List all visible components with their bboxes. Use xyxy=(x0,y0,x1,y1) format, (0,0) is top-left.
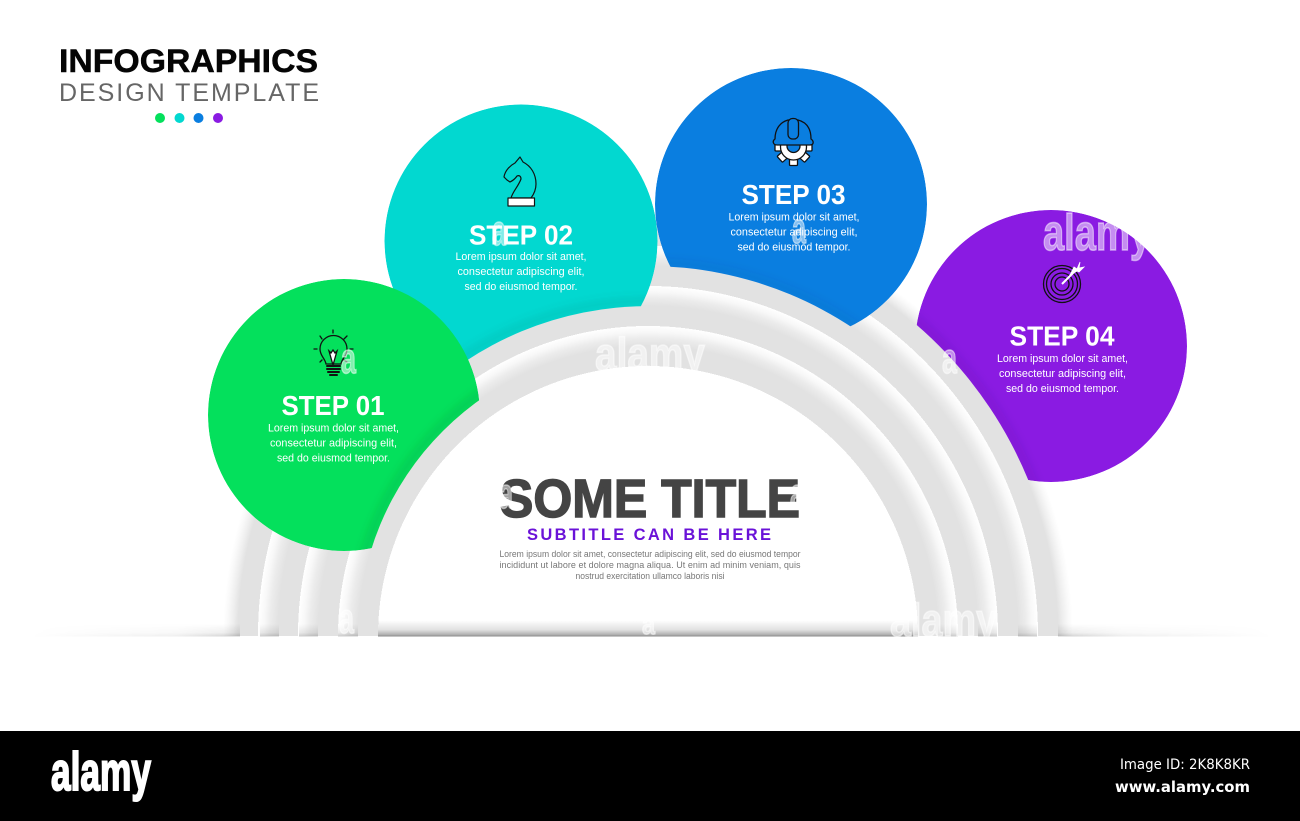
paragraph xyxy=(500,549,801,581)
purple circle shape cut by ring xyxy=(916,210,1187,482)
alamy logo: alamy xyxy=(51,742,151,802)
watermarks: a xyxy=(499,470,514,518)
step 03 text: sed do eiusmod tempor. xyxy=(738,242,850,254)
step 01 text: sed do eiusmod tempor. xyxy=(277,452,390,464)
teal circle shape cut by ring xyxy=(384,104,658,360)
header: infographics design template xyxy=(59,43,319,123)
panel: step 04 purple circle xyxy=(916,210,1187,482)
floor shadow under the half rings xyxy=(106,623,1195,636)
heading: infographics: INFOGRAPHICS xyxy=(59,43,318,79)
watermarks: a xyxy=(339,595,355,643)
concentric grey half rings xyxy=(218,206,1078,636)
watermarks xyxy=(339,204,1151,646)
step 01 text xyxy=(268,422,399,464)
step 04 text: Lorem ipsum dolor sit amet, xyxy=(997,353,1128,365)
step 01 heading: STEP 01 xyxy=(282,390,384,421)
step 03 text: Lorem ipsum dolor sit amet, xyxy=(728,212,860,224)
watermarks: a xyxy=(792,205,807,253)
step 02 text: sed do eiusmod tempor. xyxy=(464,281,578,293)
step 02 text xyxy=(456,251,586,293)
watermarks: a xyxy=(942,335,958,383)
watermarks: a xyxy=(341,335,357,383)
icon: target with dart xyxy=(1044,262,1084,302)
step 03 text: consectetur adipiscing elit, xyxy=(730,226,858,238)
paragraph: Lorem ipsum dolor sit amet, consectetur adipiscing elit, sed do eiusmod tempor xyxy=(500,549,800,559)
step 02 text: consectetur adipiscing elit, xyxy=(458,266,584,278)
green circle shape cut by ring xyxy=(208,279,480,551)
subheading: design template: DESIGN TEMPLATE xyxy=(59,79,319,107)
blue circle shape cut by ring xyxy=(655,68,927,326)
paragraph: incididunt ut labore et dolore magna aliqua. Ut enim ad minim veniam, quis xyxy=(500,560,801,570)
icon: chess knight xyxy=(504,157,536,206)
watermarks: alamy xyxy=(1043,204,1151,261)
four colour dots xyxy=(155,113,223,123)
footer bar xyxy=(0,731,1300,821)
step 01 text: consectetur adipiscing elit, xyxy=(270,438,397,450)
panel: step 03 blue circle xyxy=(655,68,927,326)
panel: step 01 green circle xyxy=(208,279,480,551)
watermarks: a xyxy=(492,207,507,255)
watermarks: alamy xyxy=(890,594,997,646)
step 04 heading: STEP 04 xyxy=(1010,320,1115,352)
image id: Image ID: 2K8K8KR xyxy=(1120,757,1250,773)
icon: helmet with gear xyxy=(773,118,813,166)
centre text block xyxy=(500,469,801,581)
step 03 heading: STEP 03 xyxy=(742,179,846,210)
watermarks: a xyxy=(642,608,655,641)
icon: light bulb xyxy=(314,330,353,375)
watermarks: a xyxy=(790,470,805,518)
step 04 text: sed do eiusmod tempor. xyxy=(1006,383,1119,395)
step 03 text xyxy=(728,212,860,254)
step 02 text: Lorem ipsum dolor sit amet, xyxy=(456,251,586,263)
panel: step 02 teal circle xyxy=(384,104,658,360)
watermarks: alamy xyxy=(595,328,705,380)
step 01 text: Lorem ipsum dolor sit amet, xyxy=(268,422,399,434)
website: www.alamy.com xyxy=(1115,778,1250,796)
step 04 text xyxy=(997,353,1128,395)
paragraph: nostrud exercitation ullamco laboris nisi xyxy=(576,571,724,581)
subtitle: SUBTITLE CAN BE HERE xyxy=(527,526,771,544)
main title: SOME TITLE xyxy=(500,469,800,529)
step 04 text: consectetur adipiscing elit, xyxy=(999,368,1126,380)
black band xyxy=(0,731,1300,821)
step 02 heading: STEP 02 xyxy=(469,220,573,250)
